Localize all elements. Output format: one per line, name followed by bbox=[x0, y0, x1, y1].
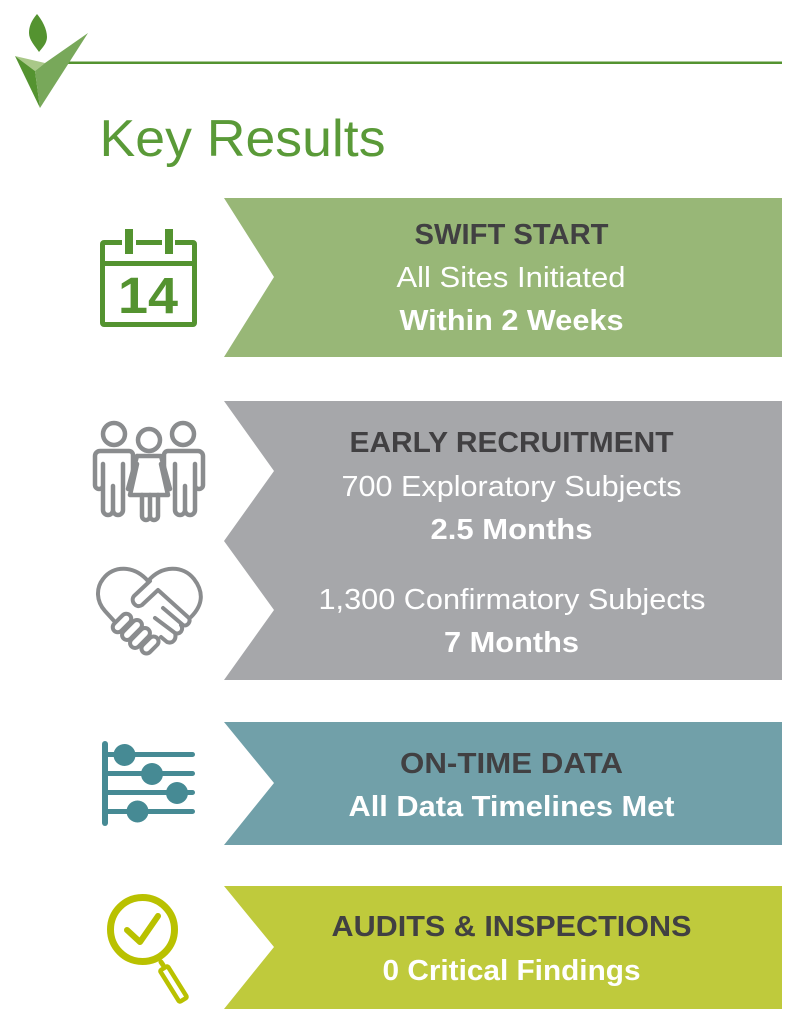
heading: swift start: SWIFT START bbox=[414, 219, 609, 251]
icon: abacus sliders bbox=[102, 741, 195, 826]
panel: on-time data bbox=[224, 722, 782, 845]
heading: on-time data: ON-TIME DATA bbox=[400, 748, 623, 780]
icon: calendar 14: 14 bbox=[118, 267, 179, 324]
title: Key Results bbox=[100, 110, 386, 168]
text: 7 months: 7 Months bbox=[444, 627, 579, 659]
icon: logo leaf and check bbox=[15, 14, 88, 108]
panel: audits and inspections bbox=[224, 886, 782, 1009]
text: 700 exploratory subjects: 700 Exploratory Subjects bbox=[342, 471, 682, 503]
text: 2.5 months: 2.5 Months bbox=[430, 514, 592, 546]
heading: early recruitment: EARLY RECRUITMENT bbox=[350, 427, 674, 459]
text: within 2 weeks: Within 2 Weeks bbox=[400, 305, 624, 337]
text: all sites initiated: All Sites Initiated bbox=[396, 262, 626, 294]
text: 1,300 confirmatory subjects: 1,300 Confirmatory Subjects bbox=[318, 584, 706, 616]
header rule bbox=[68, 62, 782, 64]
text: all data timelines met: All Data Timelines Met bbox=[348, 791, 675, 823]
text: 0 critical findings: 0 Critical Findings bbox=[382, 955, 640, 987]
icon: handshake heart bbox=[98, 569, 201, 656]
icon: magnifier with check bbox=[110, 898, 187, 1002]
panel: swift start bbox=[224, 198, 782, 357]
icon: family of three bbox=[95, 423, 203, 520]
icon: calendar 14 bbox=[102, 229, 195, 324]
heading: audits and inspections: AUDITS & INSPECTIONS bbox=[332, 911, 692, 943]
panel: early recruitment bbox=[224, 401, 782, 680]
